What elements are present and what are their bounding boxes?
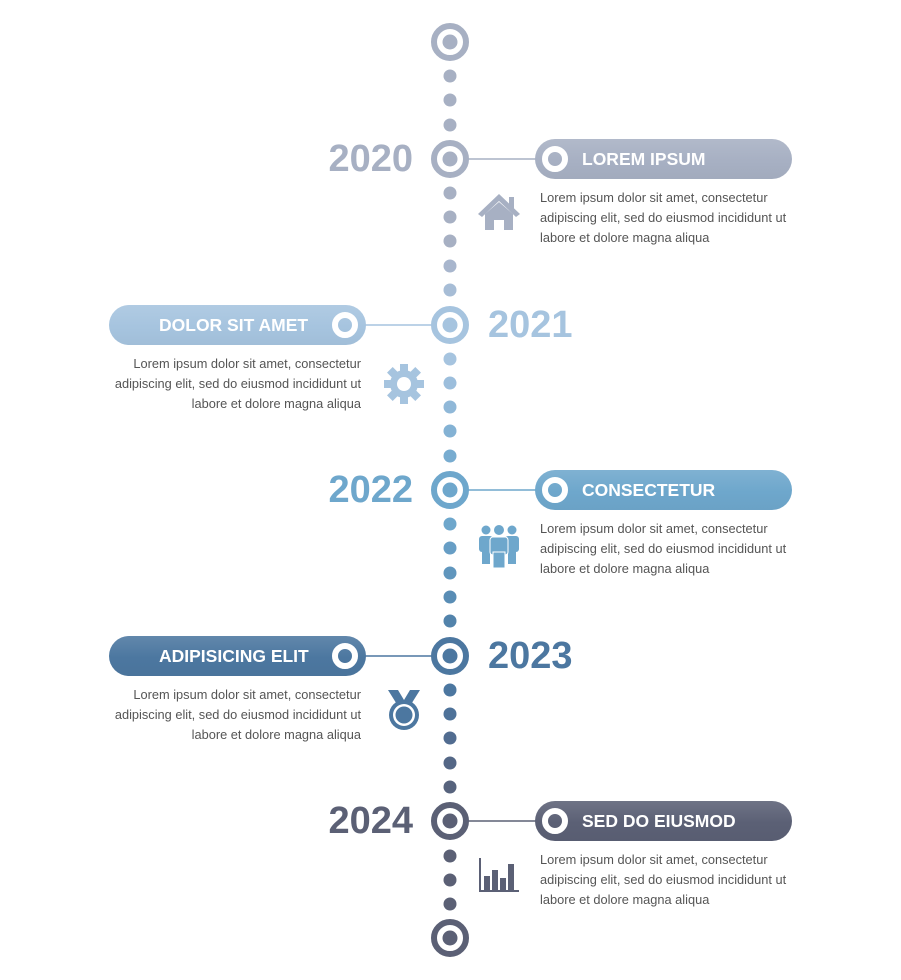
text 2023: Lorem ipsum dolor sit amet, consectetur adipiscing elit, sed do eiusmod incididunt ut labore et dolore magna aliqua (115, 687, 361, 742)
icon: medal (388, 690, 420, 730)
pill: consectetur: CONSECTETUR (582, 480, 715, 500)
pill: adipisicing elit: ADIPISICING ELIT (159, 646, 309, 666)
year 2024: 2024 (328, 800, 413, 842)
pill: dolor sit amet: DOLOR SIT AMET (159, 315, 308, 335)
text 2024: Lorem ipsum dolor sit amet, consectetur adipiscing elit, sed do eiusmod incididunt ut labore et dolore magna aliqua (540, 852, 786, 907)
year 2021: 2021 (488, 304, 573, 346)
text 2020: Lorem ipsum dolor sit amet, consectetur adipiscing elit, sed do eiusmod incididunt ut labore et dolore magna aliqua (540, 190, 786, 245)
pill: sed do eiusmod: SED DO EIUSMOD (582, 811, 736, 831)
pill: lorem ipsum (535, 139, 792, 179)
year 2023: 2023 (488, 635, 573, 677)
pill: dolor sit amet (109, 305, 366, 345)
text 2021: Lorem ipsum dolor sit amet, consectetur adipiscing elit, sed do eiusmod incididunt ut labore et dolore magna aliqua (115, 356, 361, 411)
pill: adipisicing elit (109, 636, 366, 676)
text 2022: Lorem ipsum dolor sit amet, consectetur adipiscing elit, sed do eiusmod incididunt ut labore et dolore magna aliqua (540, 521, 786, 576)
icon: gear (384, 364, 424, 404)
pill: consectetur (535, 470, 792, 510)
pill: sed do eiusmod (535, 801, 792, 841)
icon: people (479, 525, 519, 568)
icon: house (478, 194, 520, 230)
pill: lorem ipsum: LOREM IPSUM (582, 149, 705, 169)
icon: bar chart (479, 858, 519, 892)
year 2020: 2020 (328, 138, 413, 180)
year 2022: 2022 (328, 469, 413, 511)
